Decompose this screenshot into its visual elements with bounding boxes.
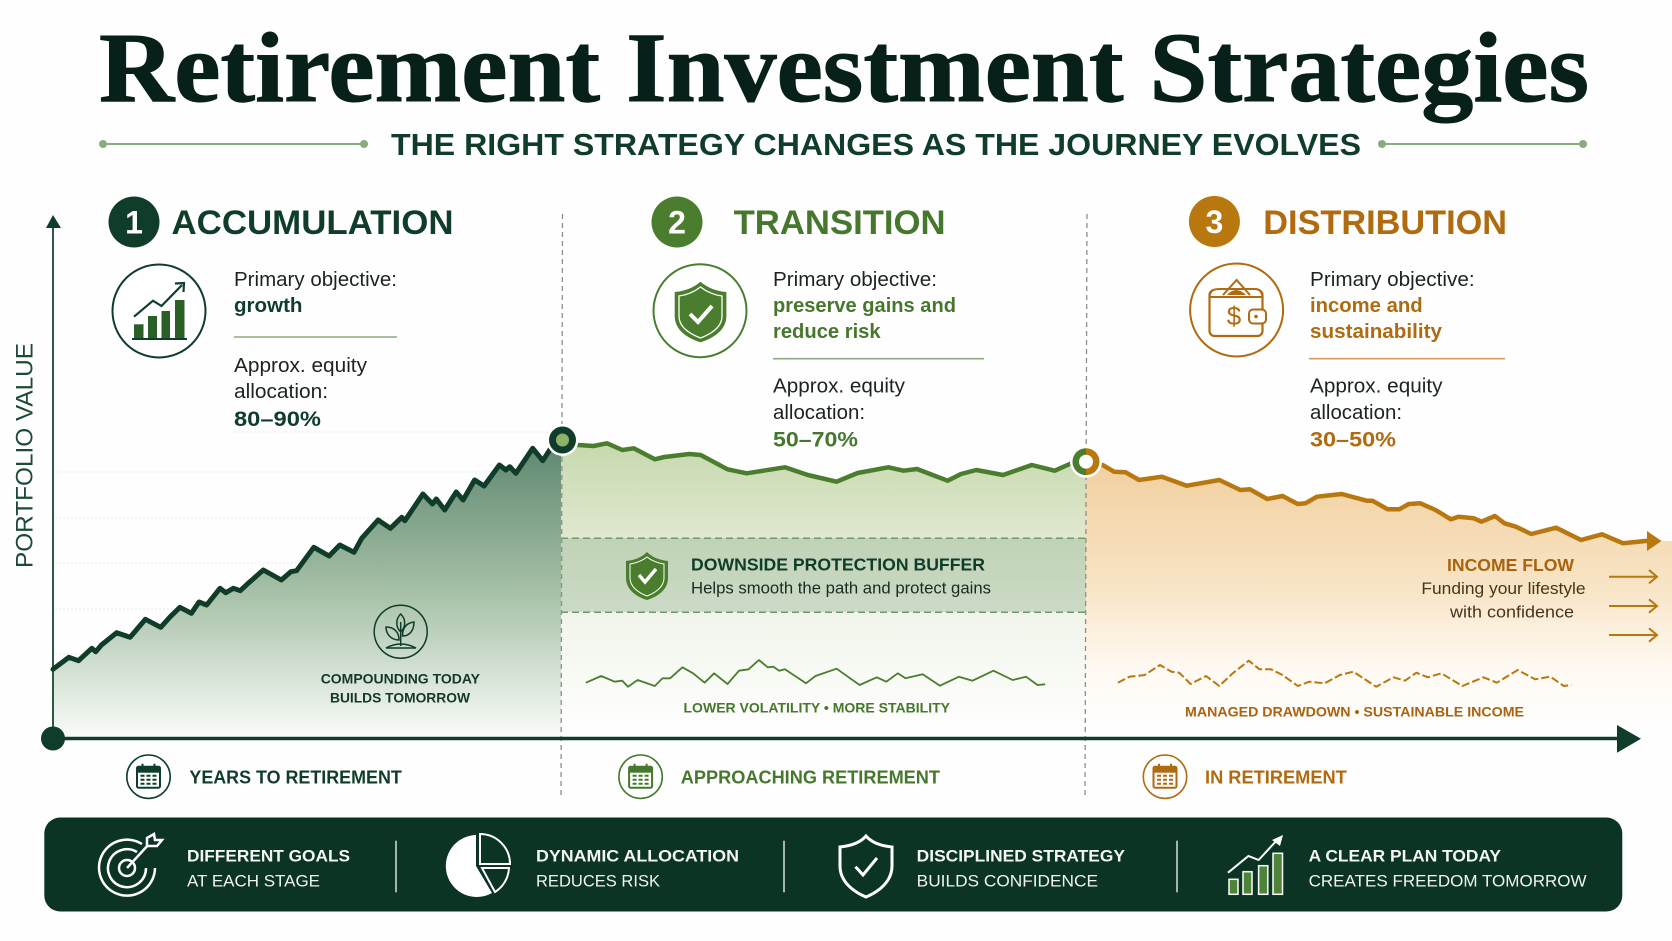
heading: distribution: DISTRIBUTION xyxy=(1263,204,1507,242)
heading: transition: TRANSITION xyxy=(734,204,946,242)
icon: buffer shield xyxy=(626,552,668,600)
objective text: income and xyxy=(1310,294,1423,317)
subtitle with rules: THE RIGHT STRATEGY CHANGES AS THE JOURNEY EVOLVES xyxy=(391,127,1361,162)
heading: accumulation: ACCUMULATION xyxy=(172,204,454,242)
equity allocation text: 50–70% xyxy=(773,429,858,452)
timeline: in retirement: IN RETIREMENT xyxy=(1205,766,1347,787)
area: accumulation xyxy=(53,442,561,736)
timeline: years to retirement xyxy=(127,755,402,798)
sparkline: lower volatility xyxy=(586,660,1045,687)
objective text: Primary objective: xyxy=(234,269,397,291)
callout: income flow: INCOME FLOW xyxy=(1447,555,1574,575)
equity allocation text: allocation: xyxy=(773,402,865,424)
takeaway: plan xyxy=(1228,835,1587,894)
y axis xyxy=(46,215,61,738)
icon: shield xyxy=(840,836,892,897)
node: accumulation to transition xyxy=(546,424,578,456)
badge 1: 1 xyxy=(125,204,143,240)
area: transition xyxy=(561,442,1086,736)
badge 1 xyxy=(108,196,160,248)
timeline: years to retirement: YEARS TO RETIREMENT xyxy=(189,766,402,787)
callout: compounding: COMPOUNDING TODAY xyxy=(321,670,481,686)
equity allocation text xyxy=(773,376,905,452)
objective text: reduce risk xyxy=(773,320,881,343)
panel: accumulation xyxy=(108,196,454,431)
buffer description: Helps smooth the path and protect gains xyxy=(691,579,991,597)
area: distribution xyxy=(1086,461,1672,736)
takeaway: strategy: BUILDS CONFIDENCE xyxy=(917,872,1098,891)
callout: income flow: with confidence xyxy=(1449,604,1574,622)
label: lower volatility: LOWER VOLATILITY • MORE STABILITY xyxy=(684,701,950,716)
badge 3 xyxy=(1189,196,1240,247)
bottom takeaway band xyxy=(44,818,1622,912)
objective text xyxy=(1310,269,1475,343)
callout: income flow xyxy=(1421,555,1586,622)
panel: distribution xyxy=(1189,196,1507,452)
takeaway: goals xyxy=(99,834,350,896)
timeline: approaching retirement xyxy=(619,755,940,798)
takeaway: plan: CREATES FREEDOM TOMORROW xyxy=(1309,872,1587,891)
icon: calendar xyxy=(619,755,662,798)
title: Retirement Investment Strategies xyxy=(99,12,1589,123)
takeaway: allocation: DYNAMIC ALLOCATION xyxy=(536,847,739,866)
icon: wallet: $ xyxy=(1227,301,1242,331)
curve: distribution with arrow xyxy=(1103,465,1662,551)
icon: pie chart xyxy=(446,834,510,897)
icon: rising chart xyxy=(1228,835,1283,894)
label: managed drawdown: MANAGED DRAWDOWN • SUSTAINABLE INCOME xyxy=(1185,705,1524,720)
icon: wallet xyxy=(1190,264,1283,356)
curve: accumulation xyxy=(53,445,553,669)
takeaway: strategy xyxy=(840,836,1126,897)
protection buffer band xyxy=(561,538,1086,612)
objective text xyxy=(773,269,956,343)
equity allocation text: allocation: xyxy=(1310,402,1402,424)
objective text: Primary objective: xyxy=(1310,269,1475,291)
callout: compounding: BUILDS TOMORROW xyxy=(330,689,471,705)
arrows: income flow xyxy=(1609,570,1657,642)
takeaway: allocation xyxy=(446,834,739,897)
equity allocation text: Approx. equity xyxy=(1310,376,1442,398)
objective text xyxy=(234,269,397,317)
sparkline: managed drawdown xyxy=(1118,661,1571,687)
takeaway: goals: AT EACH STAGE xyxy=(187,872,320,891)
subtitle with rules xyxy=(99,127,1587,162)
equity allocation text: 30–50% xyxy=(1310,429,1396,452)
objective text: Primary objective: xyxy=(773,269,937,291)
badge 3: 3 xyxy=(1206,204,1223,240)
objective text: sustainability xyxy=(1310,320,1443,343)
badge 2: 2 xyxy=(668,204,686,240)
badge 2 xyxy=(652,196,702,248)
timeline: in retirement xyxy=(1143,755,1347,798)
equity allocation text: 80–90% xyxy=(234,408,321,431)
callout: compounding xyxy=(321,605,481,705)
icon: growth chart xyxy=(112,264,206,358)
takeaway: plan: A CLEAR PLAN TODAY xyxy=(1309,847,1502,866)
equity allocation text: Approx. equity xyxy=(234,355,367,377)
buffer heading: DOWNSIDE PROTECTION BUFFER xyxy=(691,555,985,575)
equity allocation text: Approx. equity xyxy=(773,376,905,398)
equity allocation text xyxy=(1310,376,1442,452)
equity allocation text: allocation: xyxy=(234,381,328,403)
icon: target xyxy=(99,834,162,896)
callout: income flow: Funding your lifestyle xyxy=(1421,580,1586,598)
icon: calendar xyxy=(1143,755,1187,798)
x axis xyxy=(41,725,1641,753)
node: transition to distribution xyxy=(1070,446,1102,478)
equity allocation text xyxy=(234,355,367,431)
icon: shield xyxy=(654,264,746,357)
curve: transition xyxy=(578,443,1072,482)
icon: sprout xyxy=(374,605,427,658)
takeaway: goals: DIFFERENT GOALS xyxy=(187,847,350,866)
y axis label: PORTFOLIO VALUE xyxy=(12,343,38,568)
takeaway: allocation: REDUCES RISK xyxy=(536,872,661,891)
takeaway: strategy: DISCIPLINED STRATEGY xyxy=(917,847,1126,866)
icon: calendar xyxy=(127,755,170,798)
panel: transition xyxy=(652,196,984,452)
timeline: approaching retirement: APPROACHING RETIREMENT xyxy=(681,766,940,787)
objective text: growth xyxy=(234,294,302,317)
objective text: preserve gains and xyxy=(773,294,956,317)
